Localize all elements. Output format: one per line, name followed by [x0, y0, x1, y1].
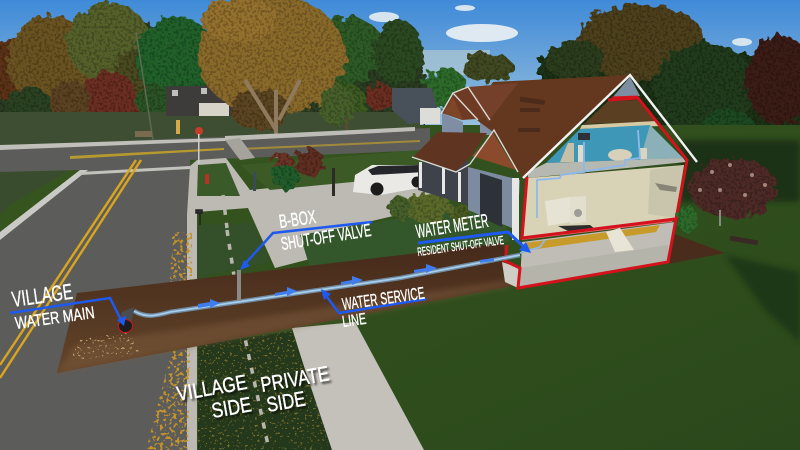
fallen leaves [146, 232, 332, 450]
left verge grass [0, 170, 70, 215]
sky background [0, 0, 800, 130]
ground base [0, 112, 800, 450]
callout: water meter [414, 211, 531, 259]
village water main [118, 307, 134, 332]
attic room [584, 100, 657, 124]
label: private side [259, 362, 331, 417]
label: village side [175, 371, 253, 423]
label: private side: PRIVATE [259, 362, 331, 397]
property dividing dashed line [223, 195, 268, 445]
background trees, left [0, 2, 514, 127]
flow arrows [198, 258, 494, 308]
callout: water service line: LINE [341, 311, 367, 331]
callout: b-box shut-off valve: B-BOX [278, 207, 318, 233]
street lamp and bench [135, 32, 153, 140]
white roof edge [523, 75, 697, 178]
far house [166, 86, 440, 124]
house plumbing [520, 130, 640, 253]
sidewalks and driveway [187, 138, 440, 450]
callout: village water main: WATER MAIN [14, 303, 96, 333]
callout: b-box shut-off valve: SHUT-OFF VALVE [279, 220, 373, 254]
attic floor [580, 121, 660, 129]
shrubs and small trees near the street [271, 85, 470, 224]
callout: village water main: VILLAGE [10, 279, 74, 312]
road surface [0, 127, 430, 450]
people, street sign and mailbox [176, 120, 335, 225]
background trees, right of house [540, 4, 800, 170]
house side wall and porch [418, 113, 520, 240]
callout: water service line: WATER SERVICE [341, 284, 426, 314]
boulevard lawns [197, 163, 510, 450]
callout: water meter: RESIDENT SHUT-OFF VALVE [416, 233, 505, 259]
callout: village water main [10, 279, 126, 333]
trench [57, 243, 512, 373]
road centre lines [0, 160, 141, 378]
b-box shut-off rod [237, 270, 241, 301]
water service pipe [134, 255, 520, 316]
golden foreground tree [198, 0, 348, 158]
callout: water service line [321, 284, 426, 331]
label: village side: SIDE [210, 393, 253, 423]
dirt mound behind the house [668, 233, 725, 264]
callout: b-box shut-off valve [240, 207, 373, 270]
label: private side: SIDE [265, 388, 307, 417]
bathroom [546, 125, 683, 163]
laundry room [522, 165, 684, 240]
red cutaway outline [503, 97, 687, 288]
basement [502, 222, 675, 288]
callout: water meter: WATER METER [414, 211, 490, 243]
cutaway gable siding [612, 77, 640, 98]
lawn mower [730, 236, 758, 245]
white SUV [353, 165, 430, 196]
cutaway house [412, 75, 697, 288]
label: village side: VILLAGE [175, 371, 249, 406]
floor between bathroom and laundry [528, 158, 686, 178]
shrub with white blossoms [677, 158, 777, 232]
roof [412, 75, 630, 178]
